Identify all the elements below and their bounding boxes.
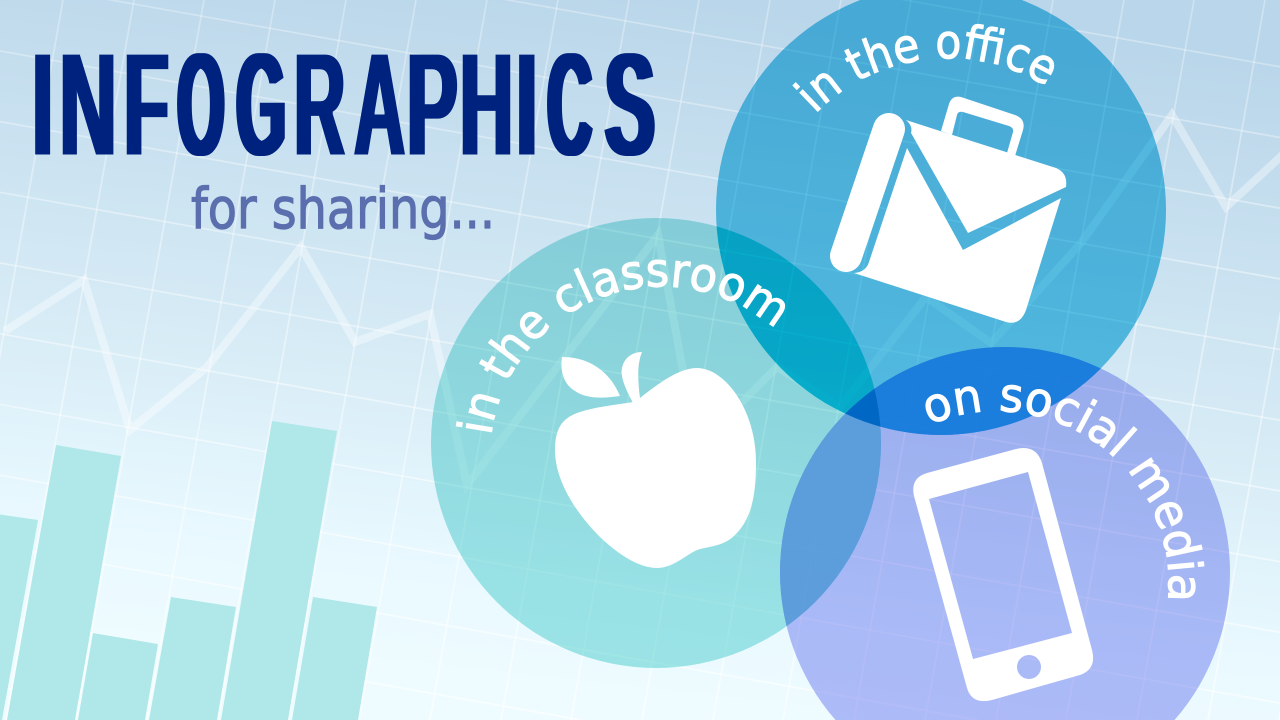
title: I xyxy=(28,22,57,188)
overlap: classroom and social media xyxy=(780,389,881,626)
overlap: office and social media xyxy=(846,347,1101,435)
title xyxy=(28,22,655,188)
circle: office xyxy=(716,0,1166,435)
circle: classroom xyxy=(431,218,881,668)
title: F xyxy=(124,22,169,188)
title: S xyxy=(605,22,655,188)
title: A xyxy=(354,22,405,188)
subtitle: for sharing... xyxy=(191,177,495,242)
title: G xyxy=(236,22,286,188)
label: in the office: in the office xyxy=(792,24,1054,112)
overlap: all three circles xyxy=(846,389,880,427)
icon: apple xyxy=(555,352,756,568)
title: H xyxy=(460,22,513,188)
title: R xyxy=(294,22,345,188)
circle: social media xyxy=(780,347,1230,720)
label: in the classroom: in the classroom xyxy=(456,260,786,432)
icon: smartphone xyxy=(913,448,1093,701)
line chart xyxy=(5,115,1280,485)
title: N xyxy=(59,22,117,188)
title: O xyxy=(178,22,224,188)
title: C xyxy=(548,22,592,188)
label: on social media: on social media xyxy=(925,384,1204,598)
title: I xyxy=(512,22,542,188)
bar chart xyxy=(0,421,377,720)
icon: briefcase xyxy=(846,97,1066,323)
title: P xyxy=(407,22,458,188)
overlap: classroom and office xyxy=(716,226,874,414)
